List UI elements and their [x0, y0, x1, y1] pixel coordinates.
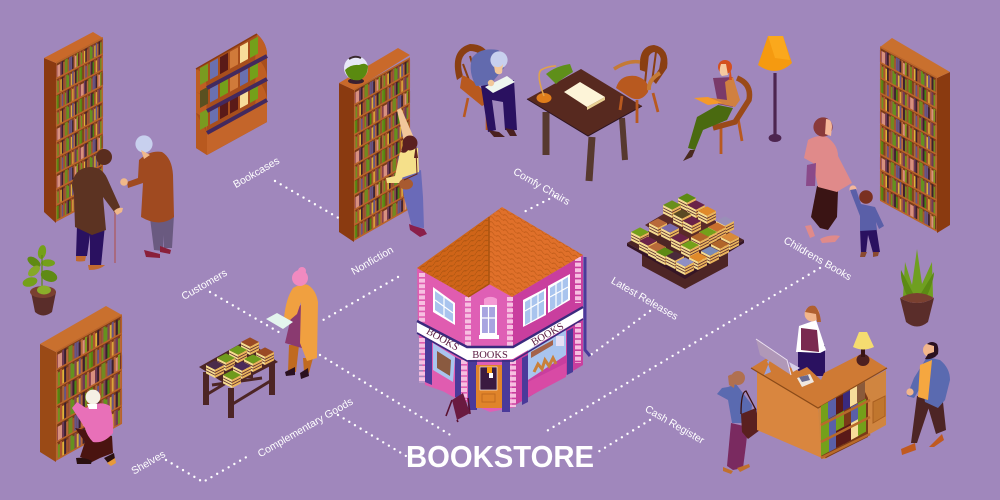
ground floor left: [425, 337, 461, 400]
book piles: [206, 337, 274, 388]
comfy chairs: table with lamp and book: [527, 64, 642, 181]
comfy chairs: woman reading: [683, 60, 750, 161]
sign text: left: BOOKS: [424, 326, 461, 354]
complementary goods: table with books: [199, 337, 278, 418]
sign text: right: BOOKS: [530, 321, 566, 348]
label: Comfy Chairs: Comfy Chairs: [511, 166, 572, 208]
label: Complementary Goods: Complementary Goods: [256, 396, 355, 460]
bookcase: bottom left: [40, 306, 122, 462]
ground floor door: [468, 360, 510, 412]
label: Nonfiction: Nonfiction: [349, 244, 396, 278]
upper windows: [433, 274, 570, 339]
customer: child: [850, 189, 884, 257]
plant: left: [22, 244, 59, 316]
customers: old woman: [120, 135, 174, 258]
book stacks: [631, 193, 739, 275]
walls: [417, 268, 468, 400]
drain pipe: [585, 257, 590, 356]
man: [471, 49, 505, 86]
coat: [72, 167, 120, 235]
rack books: [200, 37, 258, 130]
cash register: table lamp: [853, 332, 874, 366]
plant: right: [900, 249, 934, 326]
cash register: customer with bag: [717, 371, 760, 474]
comfy chairs: empty armchair: [614, 45, 667, 123]
bookstore building: [417, 207, 590, 412]
open book: [485, 76, 515, 93]
brick quoins: [422, 257, 578, 407]
cash register: clerk: [796, 306, 826, 376]
sandwich board sign: [446, 393, 470, 422]
customer: woman reaching for book: [386, 108, 427, 237]
customers: man with cane: [72, 149, 123, 270]
title: BOOKSTORE: [406, 439, 594, 474]
desk shelf: [821, 382, 870, 458]
head: [96, 149, 112, 165]
desk lamp: [536, 93, 552, 103]
legs: [76, 225, 105, 266]
label: Childrens Books: Childrens Books: [781, 235, 854, 283]
label: Cash Register: Cash Register: [643, 403, 707, 447]
bookcase: nonfiction: [339, 48, 410, 242]
floor lamp: [758, 36, 792, 142]
roof: [417, 207, 502, 297]
latest releases: display table: [627, 193, 744, 289]
label: Customers: Customers: [180, 267, 229, 303]
cash register: papers: [797, 374, 814, 387]
cash register: desk: [751, 353, 887, 459]
label: Bookcases: Bookcases: [231, 155, 282, 191]
label: Shelves: Shelves: [129, 448, 168, 477]
sign text: centre: BOOKS: [472, 350, 508, 361]
chair: [455, 44, 490, 80]
globe: [344, 56, 368, 84]
book on table: [564, 82, 605, 107]
cane: [114, 212, 116, 263]
bookcase: top right: [880, 38, 950, 233]
customer: kneeling person: [72, 390, 116, 466]
cash register: man: [901, 342, 950, 455]
dotted connector lines: [166, 181, 820, 482]
ground floor right: [522, 328, 573, 405]
customer: woman with tablet: [266, 267, 318, 379]
book rack: [196, 34, 267, 155]
bookcase: top left: [44, 32, 103, 223]
cash register: monitor: [756, 339, 800, 375]
comfy chairs: left chair with old man reading: [455, 44, 517, 137]
customer: mother: [804, 117, 857, 243]
label: Latest Releases: Latest Releases: [609, 275, 680, 323]
fascia sign: [417, 307, 583, 361]
